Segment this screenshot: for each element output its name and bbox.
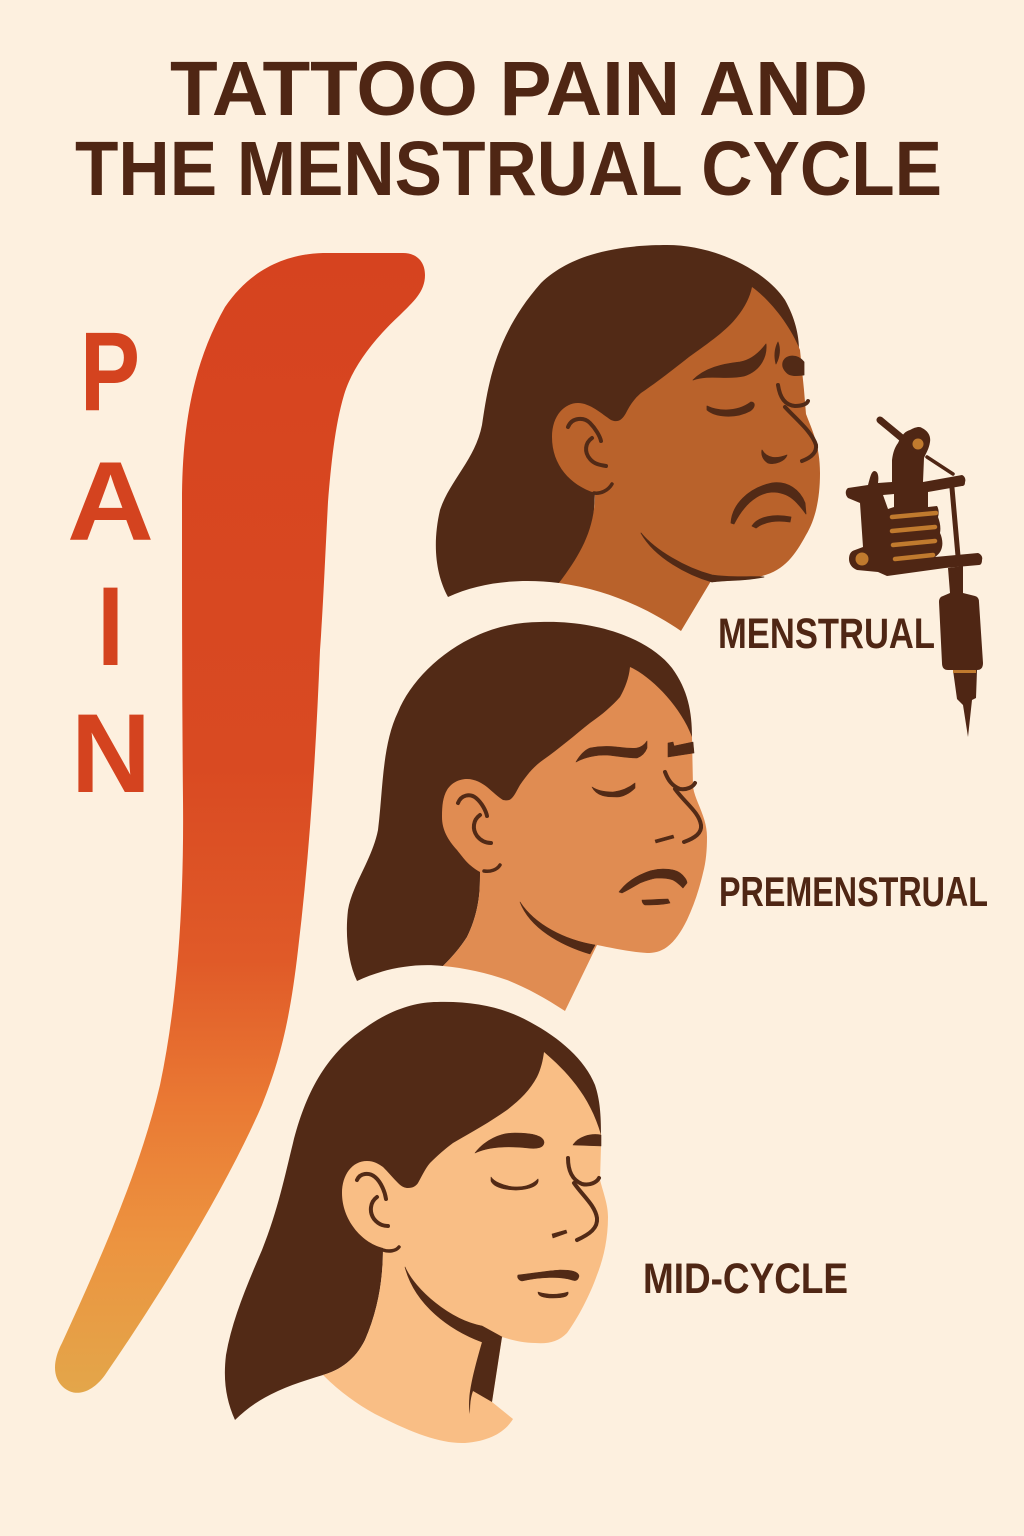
tattoo machine icon: [846, 420, 983, 737]
pain gradient bar: [55, 253, 425, 1393]
head: menstrual (pained): [436, 245, 820, 631]
needle grip and tip: [939, 566, 983, 670]
title: TATTOO PAIN AND: [170, 46, 868, 132]
frame opening: [883, 494, 894, 509]
neck shadow: [469, 1337, 502, 1414]
facial features: [520, 741, 694, 954]
coil windings: [892, 513, 936, 559]
title: THE MENSTRUAL CYCLE: [75, 126, 942, 212]
hair: [436, 245, 799, 597]
facial features: [405, 1133, 601, 1342]
skin: [552, 287, 820, 631]
vertical label: PAIN: N: [71, 691, 151, 816]
vertical label: PAIN: P: [80, 309, 140, 434]
skin: [442, 667, 707, 1011]
vertical label: PAIN: I: [97, 564, 124, 689]
vertical label: PAIN: A: [67, 439, 154, 564]
hair: [225, 1002, 601, 1420]
label: mid-cycle: MID-CYCLE: [643, 1255, 848, 1303]
copper accents: [856, 438, 976, 673]
title: [75, 46, 942, 212]
hair: [347, 622, 692, 981]
vertical label: PAIN: [67, 309, 154, 816]
head: mid-cycle (calm): [225, 1002, 608, 1443]
skin: [323, 1052, 608, 1443]
label: menstrual: MENSTRUAL: [718, 610, 935, 658]
facial features: [641, 342, 806, 582]
machine frame: [846, 427, 982, 576]
head: premenstrual (mild discomfort): [347, 622, 707, 1011]
machine arm and rod: [880, 420, 958, 556]
